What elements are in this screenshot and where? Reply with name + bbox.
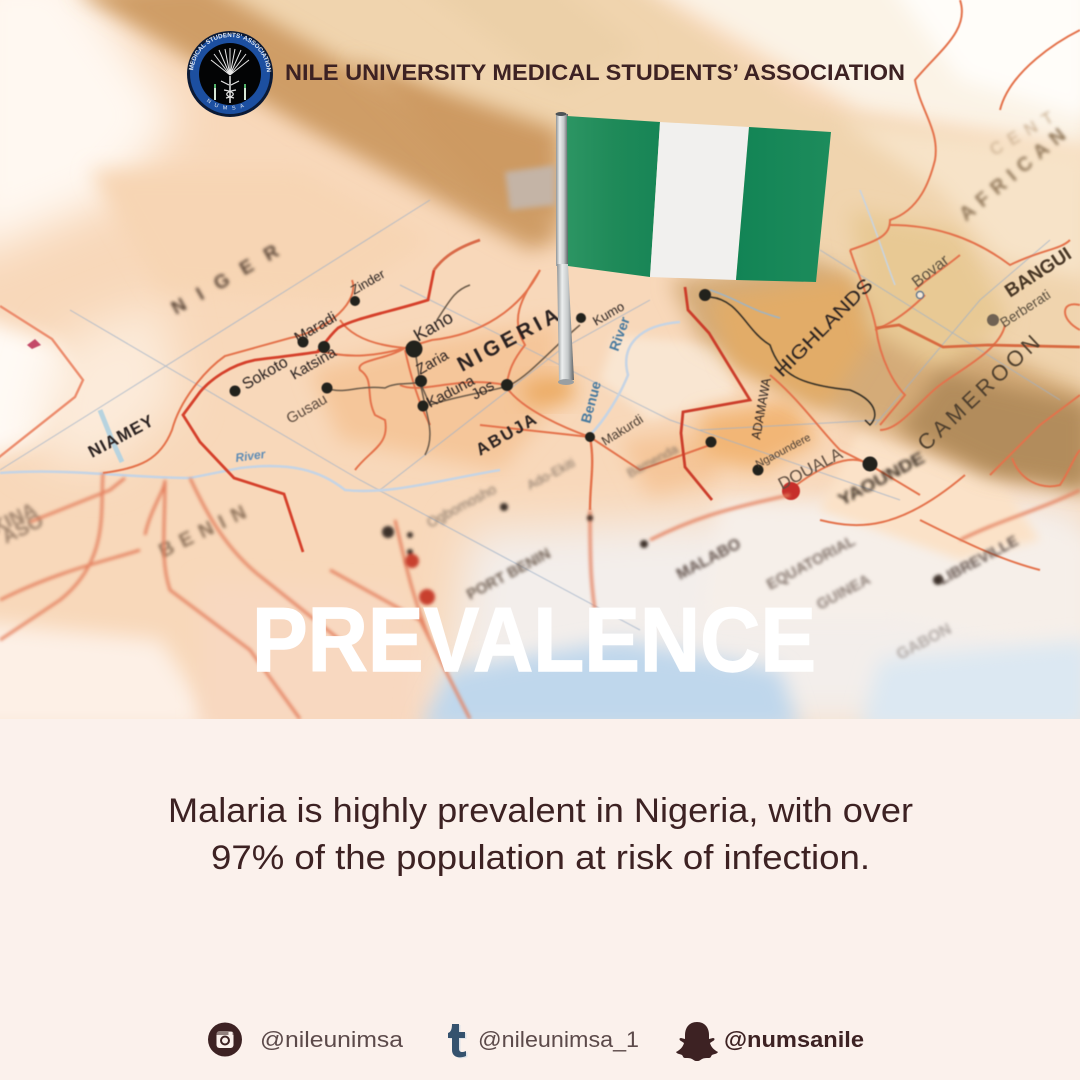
- map labels in focus: Maradi: [292, 309, 340, 346]
- map labels out of focus: LIBREVILLE: [936, 532, 1021, 589]
- lat and long grid lines: [0, 200, 1060, 630]
- logo sunburst: [211, 48, 249, 75]
- map labels in focus: Sokoto: [240, 354, 291, 393]
- map labels in focus: [85, 244, 1076, 494]
- title: PREVALENCE: PREVALENCE: [252, 590, 816, 691]
- map labels in focus: Berberati: [997, 286, 1053, 331]
- icon: Snapchat: [676, 1022, 718, 1061]
- icon: Tumblr: [448, 1024, 468, 1058]
- logo letters: NUMSA: [206, 98, 244, 110]
- map labels out of focus: BENIN: [156, 498, 257, 562]
- map labels in focus: ADAMAWA: [748, 377, 774, 441]
- map labels out of focus: [0, 104, 1076, 664]
- map labels in focus: CAMEROON: [912, 327, 1048, 456]
- map labels in focus: NIAMEY: [85, 411, 158, 462]
- organization name heading: NILE UNIVERSITY MEDICAL STUDENTS’ ASSOCIATION: [285, 60, 905, 85]
- icon: Instagram: [208, 1022, 242, 1056]
- map labels in focus: Bovar: [909, 252, 953, 291]
- logo: NUMSA seal: [187, 31, 273, 117]
- dark roads: [326, 285, 875, 455]
- map labels in focus: River: [234, 447, 267, 465]
- map labels in focus: ABUJA: [472, 409, 541, 459]
- map labels in focus: Makurdi: [599, 411, 646, 449]
- rivers: [0, 190, 895, 491]
- map labels in focus: Zaria: [414, 346, 452, 378]
- map labels in focus: HIGHLANDS: [771, 275, 877, 382]
- map labels out of focus: Ogbomosho: [424, 481, 499, 531]
- map labels in focus: Kaduna: [424, 372, 478, 412]
- city dots: [230, 289, 999, 476]
- map labels in focus: Jos: [468, 377, 497, 403]
- body statement: Malaria is highly prevalent in Nigeria, with over: [168, 792, 913, 830]
- map labels in focus: Benue: [577, 379, 604, 425]
- map labels in focus: Gusau: [284, 391, 330, 427]
- map labels out of focus: CENT: [986, 104, 1064, 159]
- red capital dots: [27, 339, 800, 500]
- flag pole: [556, 112, 574, 385]
- body statement: 97% of the population at risk of infection.: [211, 839, 870, 877]
- map labels in focus: Ngaoundere: [754, 432, 813, 471]
- logo candles: [214, 84, 246, 100]
- map labels out of focus: ASO: [0, 510, 47, 548]
- flag white stripe: [650, 122, 749, 280]
- map labels in focus: DOUALA: [775, 444, 846, 494]
- map labels in focus: River: [606, 314, 633, 353]
- map fold: shaded paper crease: [60, 0, 1080, 490]
- map labels in focus: Kano: [410, 307, 456, 345]
- map labels out of focus: MALABO: [674, 536, 744, 584]
- map labels in focus: Kumo: [590, 299, 627, 329]
- logo ring text: MEDICAL STUDENTS' ASSOCIATION: [188, 32, 272, 72]
- main red roads: [183, 240, 1080, 552]
- flag right green stripe: [736, 127, 831, 282]
- map labels out of focus: AFRICAN: [955, 120, 1076, 226]
- Snapchat handle: @numsanile: [724, 1027, 864, 1052]
- map labels out of focus: PORT BENIN: [464, 545, 554, 604]
- map labels in focus: BANGUI: [1001, 244, 1076, 302]
- map labels out of focus: NIGER: [168, 234, 296, 319]
- map labels out of focus: GABON: [894, 621, 954, 664]
- logo caduceus: [221, 76, 239, 103]
- map labels in focus: Katsina: [288, 343, 340, 383]
- blurred lower dots: [382, 503, 943, 605]
- Nigerian flag: [567, 116, 831, 282]
- body statement: [168, 792, 913, 877]
- map photograph: [0, 0, 1080, 730]
- map labels out of focus: YAOUNDE: [835, 448, 928, 510]
- map labels out of focus: Bamenda: [624, 441, 681, 481]
- map labels out of focus: Ado-Ekiti: [524, 455, 577, 493]
- flag left green stripe: [567, 116, 660, 277]
- map labels out of focus: GUINEA: [814, 571, 874, 614]
- map labels out of focus: EQUATORIAL: [764, 533, 858, 594]
- border roads in focus: [0, 0, 1080, 570]
- map labels in focus: Zinder: [348, 266, 388, 298]
- blurred lower roads: [0, 473, 1080, 719]
- Tumblr handle: @nileunimsa_1: [478, 1027, 639, 1052]
- map labels in focus: NIGERIA: [454, 302, 566, 376]
- Instagram handle: @nileunimsa: [260, 1027, 404, 1052]
- map shading: colour wash: [0, 0, 1080, 730]
